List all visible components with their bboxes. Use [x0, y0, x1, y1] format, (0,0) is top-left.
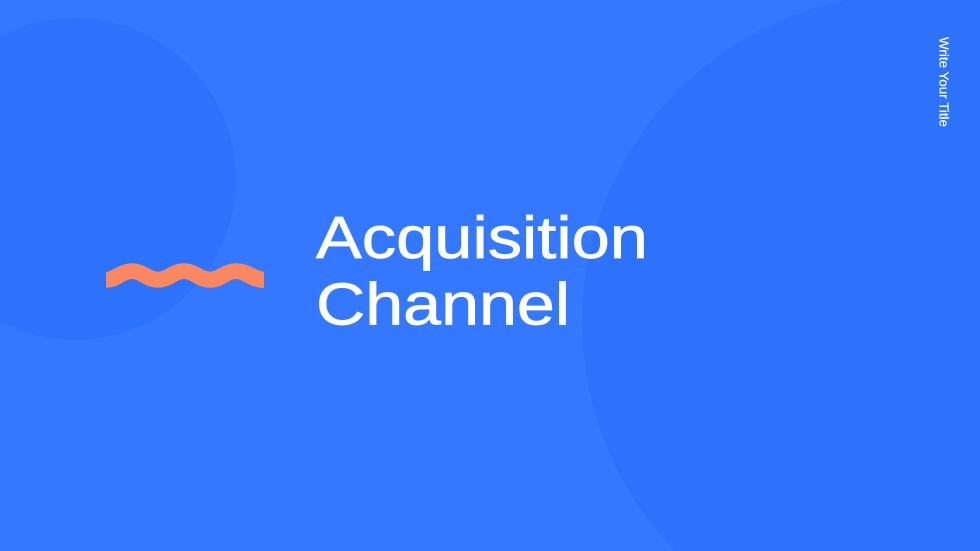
decorative circle: right: [582, 0, 980, 551]
icon: orange wave: [106, 263, 264, 288]
decorative circle: left: [0, 18, 236, 340]
title: [316, 205, 648, 338]
title line 2: Channel: [316, 272, 570, 338]
title line 1: Acquisition: [316, 205, 648, 271]
vertical label: Write Your Title: [936, 37, 950, 127]
